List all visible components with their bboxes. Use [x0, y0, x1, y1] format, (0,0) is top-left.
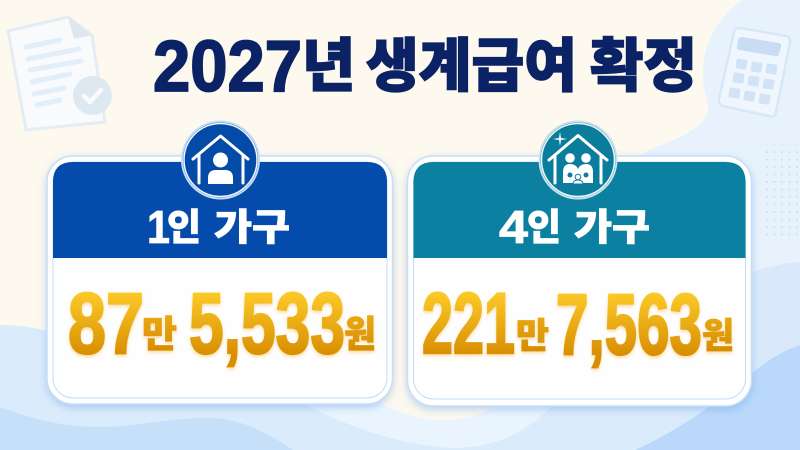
heading: 4인 가구 [499, 197, 650, 253]
value: 221만 7,563원: 원 [702, 308, 734, 359]
heading: 1인 가구: 인 [167, 197, 201, 251]
icon: house with family [540, 122, 616, 198]
icon: document with check [8, 17, 112, 130]
heading: 4인 가구: 인 [527, 197, 561, 251]
heading: 4인 가구: 4 [499, 201, 528, 253]
card body outline [53, 162, 387, 398]
value: 221만 7,563원: 7,563 [556, 277, 702, 373]
title: 확정 [590, 19, 697, 103]
value: 221만 7,563원: 만 [516, 308, 549, 359]
value: 87만 5,533원: 5,533 [189, 276, 345, 372]
title: 년 [302, 19, 355, 103]
card header [53, 162, 387, 258]
value: 221만 7,563원: 221 [422, 276, 515, 372]
card body outline [414, 162, 746, 399]
value: 87만 5,533원: 87 [68, 276, 144, 372]
heading: 1인 가구: 1 [147, 201, 170, 253]
decorative dot grid [765, 145, 800, 237]
value: 87만 5,533원: 원 [344, 304, 376, 358]
heading: 1인 가구 [147, 197, 290, 253]
icon: calculator [719, 28, 790, 116]
value: 87만 5,533원: 만 [142, 304, 177, 358]
heading: 1인 가구: 가구 [214, 197, 290, 251]
panel: 4-person household [408, 122, 752, 406]
title [153, 19, 697, 107]
title: 2027 [153, 27, 302, 107]
heading: 4인 가구: 가구 [574, 197, 650, 251]
title: 생계급여 [366, 19, 577, 103]
card header [414, 162, 746, 258]
card frame [47, 156, 392, 404]
value: 221만 7,563원 [422, 276, 734, 373]
value: 87만 5,533원 [68, 276, 376, 372]
panel: 1-person household [47, 122, 392, 404]
icon: house with person [182, 122, 259, 198]
card frame [408, 156, 752, 406]
